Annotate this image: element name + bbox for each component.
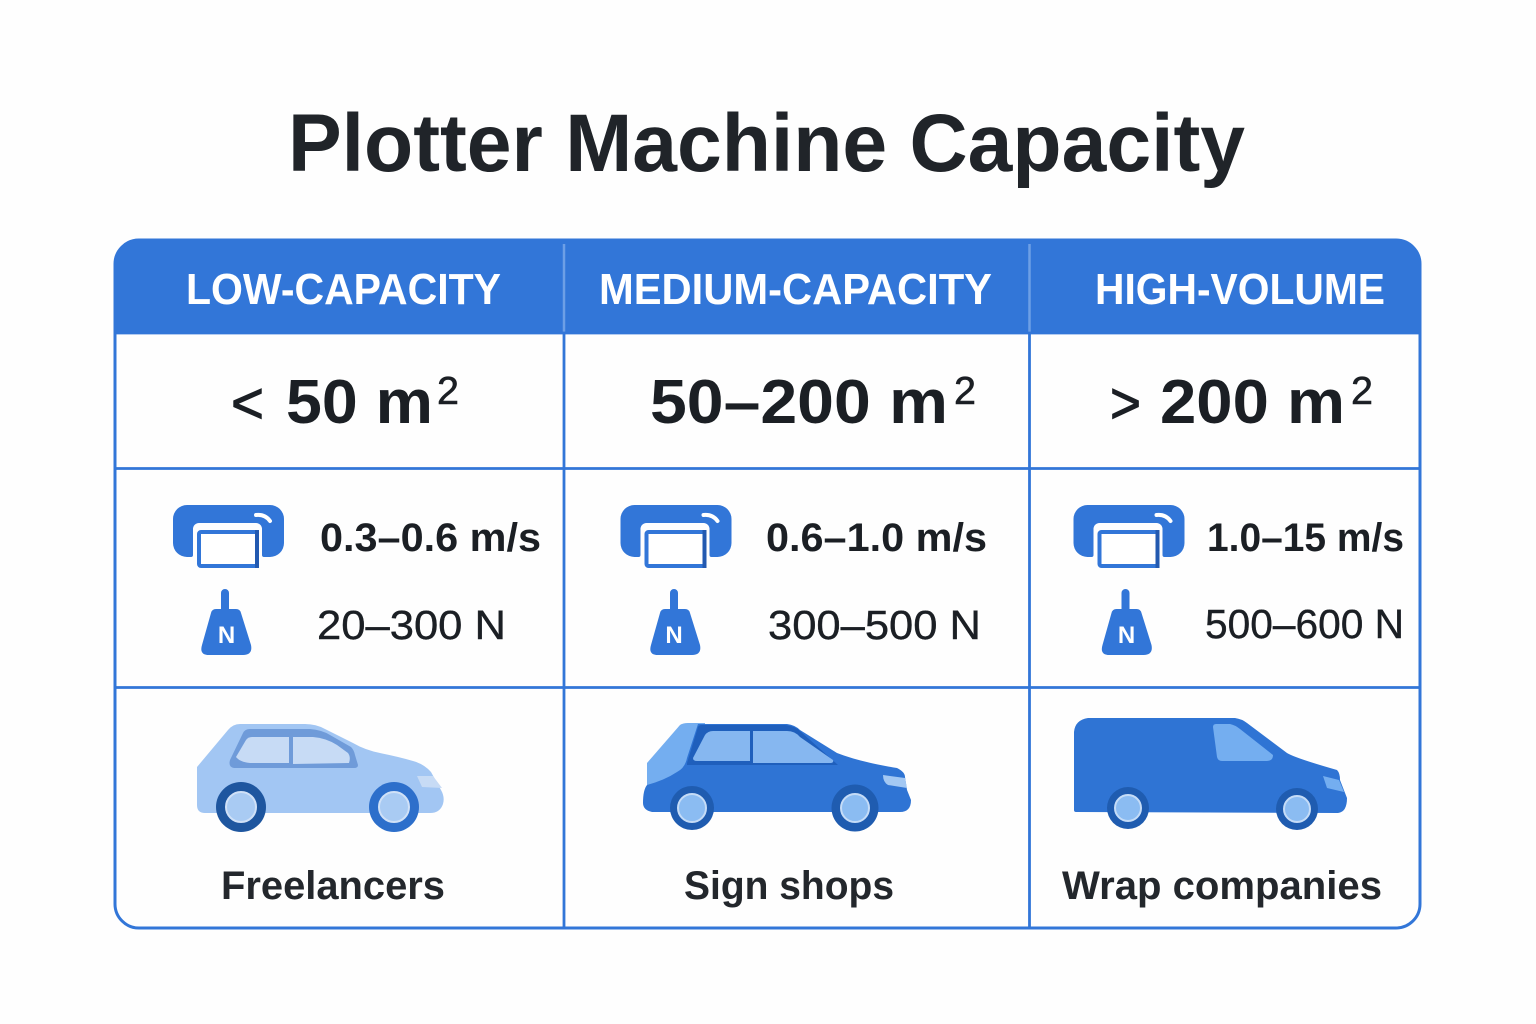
area: low capacity [231,368,459,437]
icon: force weight high [1102,589,1152,655]
icon: force weight low [201,589,251,655]
area: low capacity: 50 m [286,368,433,437]
area: medium capacity: 2 [954,370,976,413]
icon: force weight medium [650,589,700,655]
icon: blue van [1074,718,1347,830]
area: low capacity: < [231,371,264,436]
label: freelancers: Freelancers [221,864,445,908]
header: high-volume: HIGH-VOLUME [1095,265,1385,314]
label: wrap companies: Wrap companies [1062,864,1382,908]
force: low: 20–300 N [317,602,506,648]
area: low capacity: 2 [437,370,459,413]
area: medium capacity: 50–200 m [650,368,948,437]
icon: blue hatchback [643,723,911,832]
area: high volume: > [1110,371,1141,436]
area: high volume: 200 m [1160,368,1345,437]
icon: plotter high [1074,505,1184,568]
area: high volume: 2 [1351,370,1373,413]
icon: plotter low [173,505,284,568]
table [115,240,1420,928]
force: high: 500–600 N [1205,601,1404,647]
icon: light blue hatchback [197,724,444,832]
icon: force weight high: N [1118,622,1135,649]
icon: force weight low: N [218,622,235,649]
speed: medium: 0.6–1.0 m/s [766,516,987,560]
icon: plotter medium [620,505,732,568]
force: medium: 300–500 N [768,602,981,648]
title: Plotter Machine Capacity [288,98,1245,189]
icon: force weight medium: N [665,622,683,649]
header: medium-capacity: MEDIUM-CAPACITY [599,265,992,314]
speed: high: 1.0–15 m/s [1207,516,1404,560]
area: high volume [1110,368,1373,437]
label: sign shops: Sign shops [684,864,894,908]
speed: low: 0.3–0.6 m/s [320,516,541,560]
header band [115,240,1420,333]
header: low-capacity: LOW-CAPACITY [186,265,501,314]
